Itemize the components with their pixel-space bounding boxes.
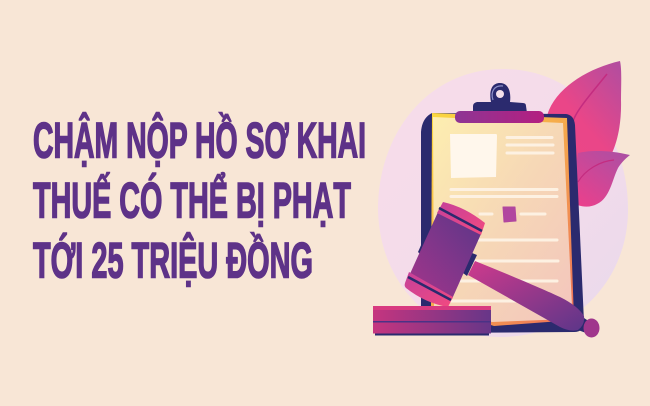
stamp square on paper <box>503 207 516 222</box>
illustration: clipboard and gavel <box>373 61 630 338</box>
title <box>33 112 366 288</box>
icon: gavel <box>405 202 600 338</box>
sound block <box>373 306 491 336</box>
icon: large leaf <box>547 61 621 170</box>
text lines on paper <box>450 138 558 301</box>
background blob <box>378 69 628 337</box>
clipboard clip bar <box>455 111 544 123</box>
paper rim <box>431 113 574 326</box>
title: CHẬM NỘP HỒ SƠ KHAI <box>33 112 366 168</box>
icon: small leaf <box>570 151 630 207</box>
photo placeholder <box>450 134 497 178</box>
gavel handle <box>468 261 584 331</box>
paper sheet <box>433 117 572 322</box>
title: TỚI 25 TRIỆU ĐỒNG <box>33 232 313 288</box>
clipboard clasp <box>473 83 527 113</box>
gavel head body <box>409 212 481 299</box>
clipboard board <box>421 113 584 333</box>
gavel collars <box>463 253 477 276</box>
gavel handle end <box>578 318 590 333</box>
gavel bottom cap <box>405 272 453 307</box>
gavel top cap <box>437 202 485 235</box>
title: THUẾ CÓ THỂ BỊ PHẠT <box>33 172 351 228</box>
